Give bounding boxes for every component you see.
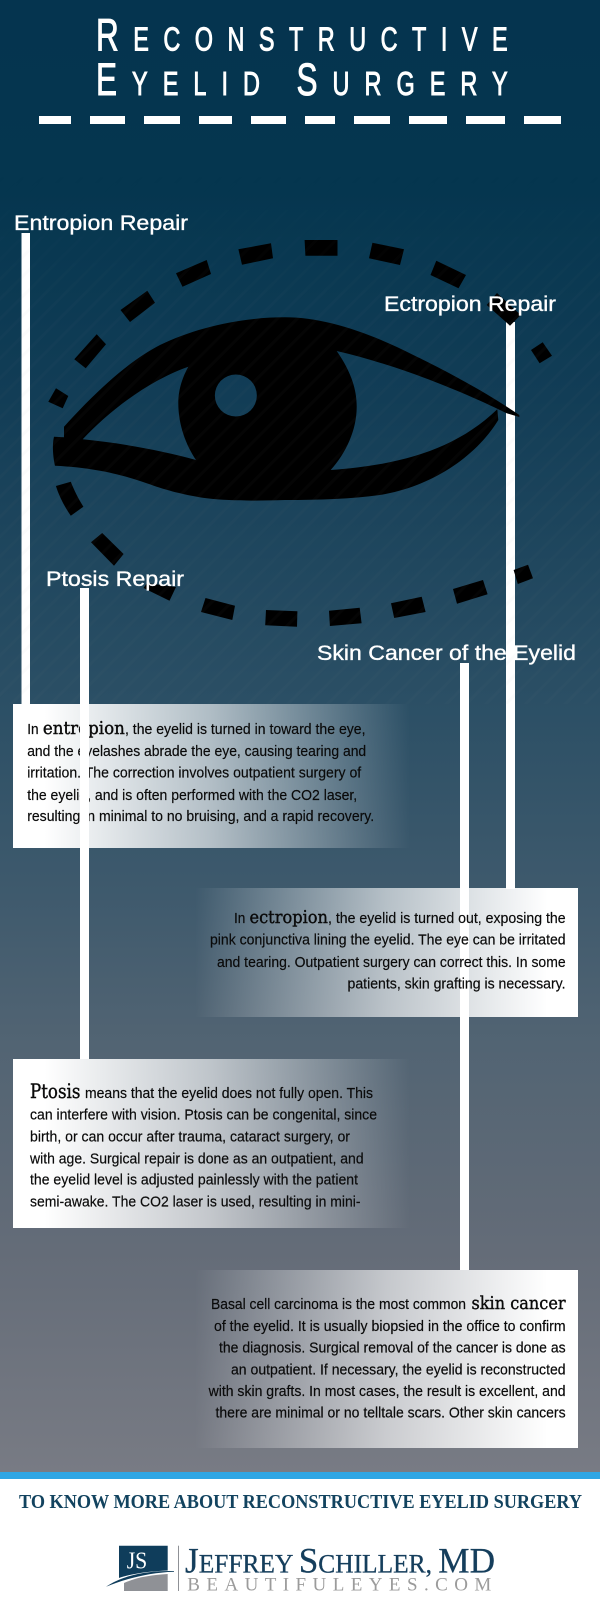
panel: entropion (13, 704, 410, 848)
skin cancer text: Basal cell carcinoma is the most common (211, 1296, 466, 1313)
ptosis text: means that the eyelid does not fully open. This (85, 1085, 373, 1102)
ptosis text: birth, or can occur after trauma, cataract surgery, or (30, 1128, 350, 1146)
ptosis text (29, 1079, 377, 1210)
logo: Jeffrey Schiller, MD (106, 1540, 495, 1595)
ptosis text: can interfere with vision. Ptosis can be congenital, since (30, 1106, 377, 1124)
eye shape with iris and pupil (53, 317, 519, 501)
blue footer stripe (0, 1472, 600, 1479)
entropion text (27, 718, 374, 825)
logo website: BEAUTIFULEYES.COM (187, 1574, 491, 1595)
skin cancer text: an outpatient. If necessary, the eyelid is reconstructed (231, 1362, 566, 1378)
entropion text: In (27, 721, 39, 738)
ptosis text: Ptosis (30, 1079, 80, 1103)
entropion text: the eyelid, and is often performed with the CO2 laser, (27, 787, 357, 804)
label: Entropion Repair: Entropion Repair (14, 211, 188, 235)
skin cancer text: the diagnosis. Surgical removal of the cancer is done as (219, 1340, 566, 1356)
skin cancer text: with skin grafts. In most cases, the result is excellent, and (208, 1383, 566, 1400)
entropion text: , the eyelid is turned in toward the eye, (125, 721, 366, 738)
ectropion text: ectropion (250, 907, 328, 928)
skin cancer connector line (460, 663, 469, 1270)
title dashed rule (39, 116, 561, 124)
entropion text: entropion (43, 718, 125, 739)
ectropion text: patients, skin grafting is necessary. (348, 976, 566, 992)
title: R ECONSTRUCTIVE (96, 11, 508, 61)
skin cancer text (208, 1293, 566, 1422)
entropion text: resulting in minimal to no bruising, and a rapid recovery. (27, 808, 374, 825)
ectropion text: and tearing. Outpatient surgery can correct this. In some (217, 954, 566, 971)
dashed oval around the eye (48, 240, 552, 627)
label: Ectropion Repair: Ectropion Repair (384, 292, 556, 316)
skin cancer text: skin cancer (472, 1293, 566, 1314)
ectropion text: , the eyelid is turned out, exposing the (328, 910, 566, 927)
label: Skin Cancer of the Eyelid: Skin Cancer of the Eyelid (317, 641, 576, 665)
logo mark (106, 1546, 174, 1591)
ptosis text: the eyelid level is adjusted painlessly with the patient (30, 1172, 359, 1188)
panel: skin cancer (195, 1270, 578, 1448)
ectropion text: In (234, 910, 245, 927)
ptosis text: with age. Surgical repair is done as an outpatient, and (29, 1150, 364, 1168)
label: Ptosis Repair: Ptosis Repair (46, 567, 184, 591)
entropion connector line (22, 233, 30, 705)
title: E YELID S URGERY (96, 56, 508, 105)
ptosis connector line (80, 588, 89, 1059)
entropion text: and the eyelashes abrade the eye, causing tearing and (27, 743, 366, 760)
ptosis text: semi-awake. The CO2 laser is used, resulting in mini- (30, 1194, 361, 1210)
faint diagonal stripes (0, 170, 600, 704)
title (96, 11, 508, 105)
entropion text: irritation. The correction involves outpatient surgery of (27, 764, 362, 782)
logo divider (178, 1546, 179, 1591)
panel: ptosis (13, 1059, 410, 1228)
ectropion connector line (506, 322, 515, 889)
ectropion text: pink conjunctiva lining the eyelid. The eye can be irritated (210, 932, 566, 948)
eye illustration (48, 240, 552, 627)
skin cancer text: there are minimal or no telltale scars. Other skin cancers (216, 1404, 566, 1422)
skin cancer text: of the eyelid. It is usually biopsied in the office to confirm (214, 1318, 566, 1335)
panel: ectropion (195, 888, 578, 1017)
ectropion text (210, 907, 566, 992)
logo mark: JS (127, 1548, 147, 1574)
logo name: JEFFREY SCHILLER, MD (185, 1540, 495, 1580)
